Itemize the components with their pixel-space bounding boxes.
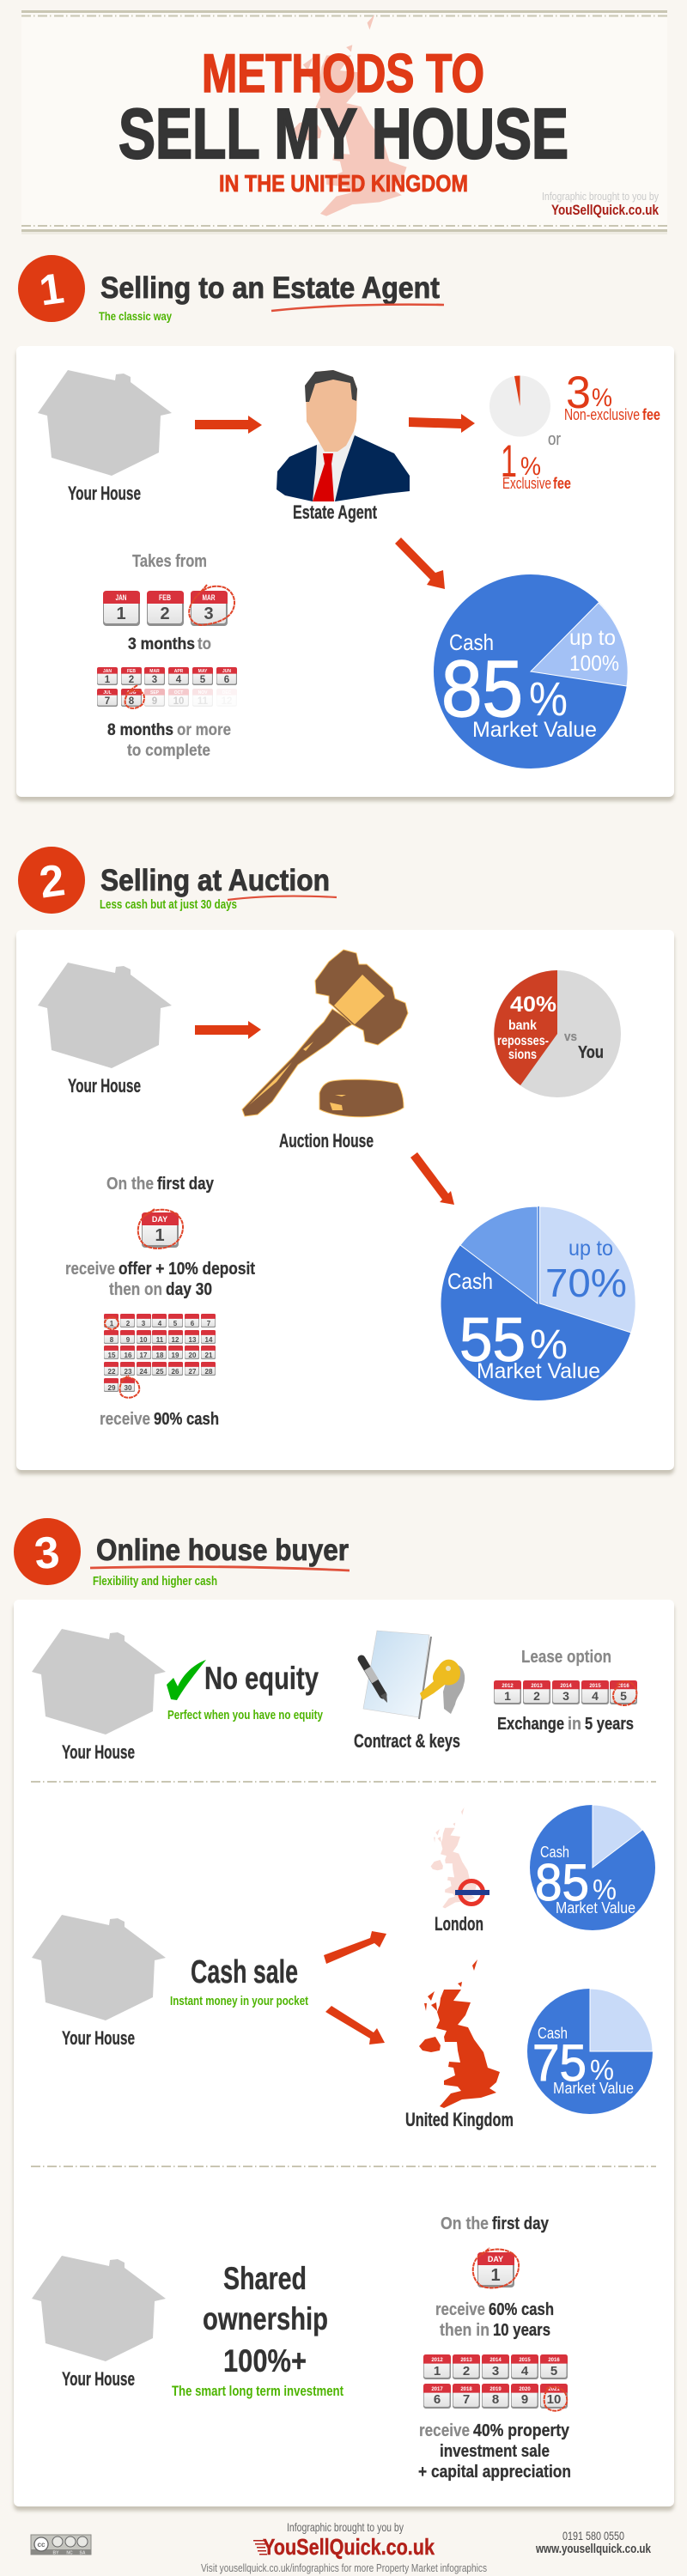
text: 3 percent non-exclusive fee: Non-exclusive: [564, 406, 640, 423]
icon: pale UK map: [290, 15, 407, 216]
arrow: agent to cash pie: [395, 538, 445, 589]
calendars: thirty days: 27: [189, 1368, 197, 1376]
calendars: thirty days: 10: [140, 1336, 148, 1344]
text: shared ownership 100 percent plus: 100%+: [223, 2343, 307, 2379]
calendars: three months: MAR: [203, 593, 216, 602]
text: shared ownership 100 percent plus: Shared: [223, 2261, 307, 2296]
calendars: eight months: 1: [105, 675, 111, 685]
text: investment sale: investment sale: [440, 2442, 550, 2461]
icon: house: [32, 2256, 166, 2361]
calendars: thirty days: 25: [156, 1368, 164, 1376]
calendars: thirty days: [104, 1314, 216, 1398]
text: receive offer plus deposit: [65, 1260, 255, 1279]
chart: cash pie 55 percent: up to: [568, 1236, 613, 1261]
text: 3 percent non-exclusive fee: [564, 368, 660, 423]
calendars: ten years: 2019: [489, 2387, 502, 2392]
calendars: ten years: 2014: [489, 2358, 502, 2363]
calendars: eight months: MAR: [149, 669, 160, 674]
calendars: thirty days: 28: [205, 1368, 213, 1376]
label: auction house: Auction House: [279, 1130, 374, 1151]
calendars: eight months: 4: [176, 675, 182, 685]
icon: number 2 badge: [18, 847, 85, 914]
label: london: London: [435, 1913, 483, 1935]
calendars: thirty days: 17: [140, 1352, 148, 1359]
calendars: eight months: 9: [152, 696, 157, 707]
text: then on day 30: [109, 1280, 212, 1299]
chart: cash pie 55 percent: Cash: [447, 1268, 493, 1294]
subheading: perfect when you have no equity: Perfect when you have no equity: [167, 1708, 324, 1722]
text: to complete: to complete: [127, 742, 210, 760]
calendars: eight months: 6: [224, 675, 229, 685]
calendars: ten years: 2016: [548, 2358, 560, 2363]
calendars: ten years: 2: [463, 2364, 470, 2379]
calendar: day 1: DAY: [488, 2255, 503, 2263]
text: website: www.yousellquick.co.uk: [535, 2542, 652, 2556]
icon: London map with roundel: [431, 1807, 489, 1908]
panel: estate agent: [16, 346, 674, 797]
subheading: instant money: Instant money in your pocket: [170, 1994, 308, 2008]
text: or: or: [548, 430, 561, 449]
subheading: the classic way: The classic way: [99, 309, 172, 323]
calendars: eight months: 10: [173, 696, 184, 707]
calendars: ten years: 2018: [460, 2387, 472, 2392]
chart: cash pie 85 percent: [434, 574, 628, 769]
icon: creative commons badge: [31, 2535, 91, 2555]
title: sell my house: SELL MY HOUSE: [119, 94, 568, 173]
text: then on day 30: then on: [109, 1280, 162, 1299]
label: united kingdom: United Kingdom: [405, 2109, 514, 2130]
text: brought to you by: Infographic brought to you by: [542, 190, 659, 203]
calendars: thirty days: 14: [205, 1336, 213, 1344]
section 1 heading: [18, 255, 444, 323]
text: lease option: Lease option: [521, 1648, 611, 1667]
chart: uk pie 75 percent: [527, 1989, 653, 2114]
text: exchange in 5 years: Exchange: [497, 1715, 564, 1734]
text: visit site: Visit yousellquick.co.uk/infographics for more Property Market infographics: [201, 2561, 487, 2574]
calendars: eight months: 3: [152, 675, 157, 685]
text: 3 months to: 3 months: [128, 635, 195, 653]
text: shared ownership 100 percent plus: ownership: [203, 2301, 328, 2336]
calendars: eight months: NOV: [198, 690, 208, 696]
text: no equity: No equity: [204, 1661, 319, 1696]
icon: creative commons badge: cc: [38, 2541, 46, 2549]
text: receive 40 percent property: receive: [419, 2421, 470, 2440]
footer: [31, 2520, 652, 2574]
text: on the first day: On the: [441, 2215, 489, 2233]
chart: cash pie 85 percent: up to: [569, 626, 616, 650]
calendars: ten years: 1: [434, 2364, 441, 2379]
text: receive 60 percent cash: 60% cash: [489, 2300, 554, 2319]
calendars: five years: 2012: [502, 1684, 514, 1689]
calendars: ten years: 2013: [460, 2358, 472, 2363]
label: your house: Your House: [68, 1075, 141, 1097]
calendars: five years: 2: [533, 1689, 540, 1703]
calendars: eight months: 11: [198, 696, 209, 707]
text: on the first day: [106, 1175, 215, 1194]
label: your house: Your House: [68, 483, 141, 504]
icon: number 3 badge: [14, 1518, 81, 1585]
calendars: ten years: 7: [463, 2392, 470, 2407]
icon: creative commons badge: NC: [66, 2550, 73, 2555]
text: 3 percent non-exclusive fee: %: [592, 384, 612, 412]
icon: house: [32, 1915, 166, 2020]
calendars: ten years: 4: [521, 2364, 529, 2379]
calendars: thirty days: 16: [125, 1352, 132, 1359]
calendars: ten years: 2017: [431, 2387, 443, 2392]
icon: gavel: [242, 950, 408, 1117]
calendars: ten years: 2020: [519, 2387, 531, 2392]
subheading: flexibility: Flexibility and higher cash: [93, 1574, 217, 1589]
chart: repossessions versus you pie: vs: [564, 1030, 577, 1044]
calendars: thirty days: 23: [125, 1368, 132, 1376]
text: 1 percent exclusive fee: [501, 436, 571, 492]
calendars: eight months: 2: [129, 675, 134, 685]
calendars: five years: [494, 1680, 637, 1705]
chart: london pie 85 percent: Market Value: [556, 1899, 635, 1917]
text: 3 percent non-exclusive fee: 3: [566, 368, 591, 418]
calendars: thirty days: 22: [108, 1368, 116, 1376]
calendars: five years: 3: [562, 1689, 569, 1703]
icon: house: [38, 963, 172, 1068]
section 2 heading: [18, 847, 337, 914]
text: receive 90 percent cash: [100, 1410, 219, 1429]
arrow: cash sale to united kingdom: [325, 2006, 385, 2044]
calendar: day 1: [138, 1209, 183, 1249]
chart: london pie 85 percent: 85: [535, 1854, 589, 1911]
calendars: thirty days: 26: [172, 1368, 179, 1376]
calendar: day 1: 1: [490, 2266, 501, 2285]
calendars: three months: 2: [160, 605, 170, 623]
calendars: eight months: JAN: [103, 669, 112, 674]
calendars: ten years: [423, 2354, 568, 2411]
chart: london pie 85 percent: [530, 1805, 655, 1930]
panel: header banner: [21, 10, 667, 234]
icon: number 1 badge: 1: [36, 264, 67, 315]
title: in the united kingdom: IN THE UNITED KINGDOM: [219, 170, 468, 197]
text: exchange in 5 years: [497, 1715, 634, 1734]
chart: cash pie 85 percent: 100%: [569, 652, 619, 676]
calendars: ten years: 3: [492, 2364, 499, 2379]
calendars: five years: 2014: [560, 1684, 572, 1689]
chart: cash pie 55 percent: Market Value: [477, 1359, 600, 1383]
calendars: three months: 3: [204, 605, 214, 623]
calendars: eight months: SEP: [150, 690, 160, 696]
text: 8 months or more: [107, 721, 231, 739]
calendars: eight months: 8: [129, 696, 135, 707]
calendars: thirty days: 4: [158, 1320, 162, 1327]
calendars: ten years: 10: [547, 2392, 561, 2407]
chart: cash pie 55 percent: %: [530, 1322, 568, 1368]
text: 1 percent exclusive fee: Exclusive: [502, 475, 551, 492]
calendars: eight months: AUG: [126, 690, 137, 696]
panel: auction: [16, 930, 674, 1470]
arrow: house to agent: [195, 416, 262, 434]
chart: repossessions versus you pie: [494, 970, 621, 1097]
arrow: agent to fees: [409, 414, 475, 433]
panel: online house buyer: [14, 1600, 674, 2506]
text: phone: 0191 580 0550: [562, 2529, 624, 2543]
text: 8 months or more: 8 months: [107, 721, 173, 739]
calendars: thirty days: 11: [156, 1336, 164, 1344]
calendars: ten years: 6: [434, 2392, 441, 2407]
arrow: cash sale to london: [324, 1931, 386, 1964]
calendars: eight months: MAY: [198, 669, 208, 674]
calendars: thirty days: 18: [156, 1352, 164, 1359]
calendars: thirty days: 24: [140, 1368, 148, 1376]
calendars: eight months: APR: [174, 669, 184, 674]
heading: selling to an estate agent: Selling to an Estate Agent: [100, 271, 440, 305]
calendars: ten years: 9: [521, 2392, 528, 2407]
calendars: ten years: 5: [550, 2364, 557, 2379]
text: on the first day: first day: [492, 2215, 550, 2233]
calendars: thirty days: 6: [191, 1320, 195, 1327]
chart: cash pie 55 percent: [441, 1206, 635, 1400]
text: cash sale: Cash sale: [191, 1954, 298, 1990]
text: exchange in 5 years: 5 years: [585, 1715, 634, 1734]
logo: YouSellQuick: YouSellQuick.co.uk: [551, 202, 659, 218]
chart: uk pie 75 percent: Cash: [538, 2025, 568, 2042]
text: 3 percent non-exclusive fee: fee: [642, 406, 660, 423]
calendars: ten years: 2012: [431, 2358, 443, 2363]
calendar: day 1: 1: [155, 1226, 165, 1245]
chart: cash pie 85 percent: %: [529, 671, 568, 726]
chart: repossessions versus you pie: sions: [508, 1048, 537, 1062]
title: methods to: METHODS TO: [202, 44, 484, 104]
calendars: three months: 1: [116, 605, 126, 623]
icon: house: [38, 370, 172, 476]
calendars: thirty days: 9: [126, 1336, 131, 1344]
calendars: eight months: FEB: [127, 669, 136, 674]
calendar: day 1: [473, 2248, 519, 2287]
chart: uk pie 75 percent: Market Value: [553, 2080, 634, 2097]
calendars: thirty days: 19: [172, 1352, 179, 1359]
calendars: five years: 5: [620, 1689, 627, 1703]
calendars: thirty days: 13: [189, 1336, 197, 1344]
text: shared ownership 100 percent plus: [203, 2261, 328, 2379]
text: 1 percent exclusive fee: %: [520, 453, 541, 481]
text: 1 percent exclusive fee: fee: [553, 475, 571, 492]
icon: red UK map: [419, 1959, 500, 2108]
section 3 heading: [14, 1518, 350, 1589]
icon: number 2 badge: 2: [36, 855, 68, 908]
chart: cash pie 85 percent: Market Value: [472, 718, 597, 742]
chart: repossessions versus you pie: bank: [508, 1018, 537, 1033]
calendars: three months: FEB: [159, 593, 171, 602]
chart: uk pie 75 percent: %: [590, 2054, 614, 2086]
chart: repossessions versus you pie: You: [578, 1043, 604, 1062]
chart: cash pie 55 percent: 70%: [545, 1261, 627, 1305]
chart: uk pie 75 percent: 75: [532, 2034, 587, 2092]
icon: creative commons badge: BY: [53, 2550, 59, 2555]
text: brought to you by: Infographic brought to you by: [287, 2520, 404, 2534]
text: receive 90 percent cash: receive: [100, 1410, 150, 1429]
text: then in 10 years: then in: [440, 2321, 489, 2340]
calendars: eight months: 5: [200, 675, 206, 685]
calendars: thirty days: 1: [110, 1320, 114, 1327]
calendars: thirty days: 15: [108, 1352, 116, 1359]
text: then in 10 years: 10 years: [493, 2321, 550, 2340]
text: receive 40 percent property: [419, 2421, 570, 2440]
subheading: smart investment: The smart long term investment: [172, 2383, 344, 2399]
chart: repossessions versus you pie: 40%: [510, 993, 556, 1017]
text: then on day 30: day 30: [166, 1280, 212, 1299]
text: 1 percent exclusive fee: 1: [501, 436, 517, 487]
text: receive 40 percent property: 40% property: [473, 2421, 570, 2440]
chart: repossessions versus you pie: reposses-: [497, 1034, 549, 1048]
calendars: eight months: JUL: [103, 690, 112, 696]
chart: cash pie 55 percent: 55: [459, 1306, 526, 1375]
icon: contract and keys: [362, 1631, 465, 1719]
calendars: five years: 2015: [589, 1684, 601, 1689]
chart: cash pie 85 percent: 85: [441, 644, 523, 733]
calendars: five years: 4: [592, 1689, 599, 1703]
logo: YouSellQuick: YouSellQuick.co.uk: [263, 2534, 435, 2560]
calendars: eight months: [97, 667, 237, 708]
label: your house: Your House: [62, 1741, 135, 1763]
text: 3 months to: to: [198, 635, 211, 653]
calendar: day 1: DAY: [152, 1215, 167, 1224]
calendars: five years: 1: [504, 1689, 511, 1703]
heading: online house buyer: Online house buyer: [96, 1534, 349, 1567]
calendars: five years: 2013: [531, 1684, 543, 1689]
chart: london pie 85 percent: %: [593, 1874, 617, 1905]
calendars: three months: [103, 585, 234, 626]
calendars: thirty days: 29: [108, 1384, 116, 1392]
calendars: three months: JAN: [115, 593, 127, 602]
calendars: ten years: 2021: [548, 2387, 560, 2392]
calendars: eight months: 7: [105, 696, 110, 707]
calendars: eight months: OCT: [174, 690, 183, 696]
icon: house: [32, 1629, 166, 1735]
calendars: thirty days: 7: [207, 1320, 211, 1327]
text: receive 60 percent cash: [435, 2300, 554, 2319]
calendars: thirty days: 3: [142, 1320, 146, 1327]
text: takes from: Takes from: [132, 552, 207, 571]
calendars: ten years: 2015: [519, 2358, 531, 2363]
arrow: house to auction: [195, 1021, 261, 1039]
text: on the first day: On the: [106, 1175, 154, 1194]
text: on the first day: [441, 2215, 550, 2233]
calendars: eight months: JUN: [222, 669, 231, 674]
calendars: thirty days: 5: [173, 1320, 178, 1327]
icon: creative commons badge: SA: [80, 2550, 86, 2555]
text: receive offer plus deposit: offer + 10% deposit: [119, 1260, 255, 1279]
icon: green tick: [167, 1660, 206, 1700]
icon: number 3 badge: 3: [33, 1528, 62, 1579]
calendars: thirty days: 21: [205, 1352, 213, 1359]
text: receive 90 percent cash: 90% cash: [154, 1410, 219, 1429]
calendars: five years: 2016: [617, 1684, 629, 1689]
arrow: auction to cash pie: [410, 1152, 454, 1205]
text: on the first day: first day: [157, 1175, 215, 1194]
calendars: eight months: 12: [222, 696, 232, 707]
calendars: ten years: 8: [492, 2392, 499, 2407]
label: contract and keys: Contract & keys: [354, 1730, 460, 1752]
calendars: thirty days: 20: [189, 1352, 197, 1359]
icon: estate agent figure: [277, 370, 410, 501]
calendars: eight months: DEC: [222, 690, 232, 696]
calendars: thirty days: 8: [110, 1336, 114, 1344]
calendars: thirty days: 2: [126, 1320, 131, 1327]
chart: cash pie 85 percent: Cash: [449, 629, 494, 655]
calendars: thirty days: 30: [125, 1384, 132, 1392]
chart: fee pie: [489, 375, 550, 436]
chart: london pie 85 percent: Cash: [540, 1844, 569, 1861]
icon: number 1 badge: [18, 255, 85, 322]
label: your house: Your House: [62, 2368, 135, 2390]
text: 8 months or more: or more: [177, 721, 231, 739]
subheading: less cash: Less cash but at just 30 days: [100, 897, 237, 912]
label: your house: Your House: [62, 2027, 135, 2049]
text: receive 60 percent cash: receive: [435, 2300, 485, 2319]
text: exchange in 5 years: in: [568, 1715, 581, 1734]
text: receive offer plus deposit: receive: [65, 1260, 115, 1279]
heading: selling at auction: Selling at Auction: [100, 864, 330, 897]
calendars: thirty days: 12: [172, 1336, 179, 1344]
label: estate agent: Estate Agent: [293, 501, 377, 523]
text: then in 10 years: [440, 2321, 550, 2340]
text: capital appreciation: + capital appreciation: [418, 2463, 571, 2482]
